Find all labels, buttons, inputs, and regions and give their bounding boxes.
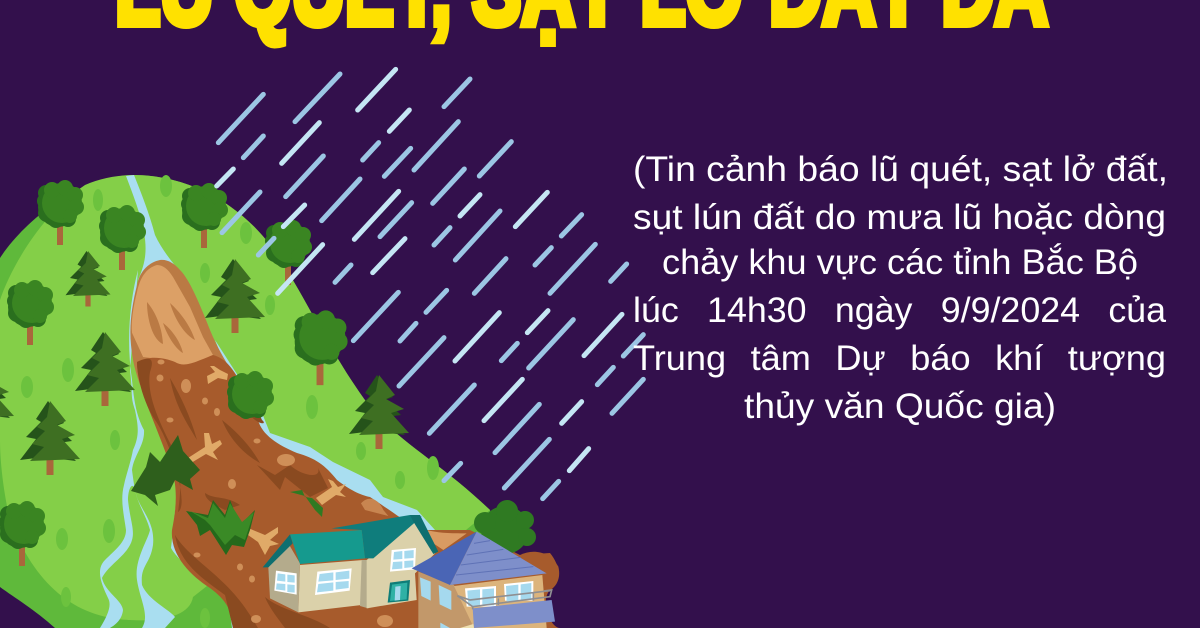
landslide scar [130, 260, 240, 385]
source note text: sụt lún đất do mưa lũ hoặc dòng [633, 198, 1166, 237]
back roof [332, 515, 422, 558]
source note text: thủy văn Quốc gia) [744, 387, 1056, 426]
front roof [290, 530, 365, 564]
debris flow [137, 355, 560, 628]
pines [66, 251, 110, 306]
tree behind house [474, 500, 536, 554]
houses [263, 499, 559, 628]
grass tufts [21, 175, 439, 628]
rain streaks [217, 69, 643, 499]
blue house [418, 572, 475, 628]
fallen logs [188, 366, 346, 555]
rocks [156, 360, 393, 627]
hill base [0, 175, 520, 628]
green house walls [268, 543, 300, 612]
river left branches [100, 270, 175, 628]
source note text: chảy khu vực các tỉnh Bắc Bộ [662, 243, 1138, 282]
source note text: (Tin cảnh báo lũ quét, sạt lở đất, [633, 150, 1168, 189]
door [388, 580, 410, 603]
source note text [633, 150, 1168, 426]
mound [517, 552, 559, 593]
fallen pines [131, 435, 323, 555]
round trees [37, 180, 84, 245]
river along flow [171, 340, 435, 628]
windows [274, 548, 416, 595]
flow shading [137, 359, 330, 628]
illustration: hillside with landslide [0, 175, 560, 628]
bush on flow [227, 371, 274, 419]
source note text: lúc 14h30 ngày 9/9/2024 của [633, 291, 1167, 330]
river upper [126, 175, 200, 310]
hill light surface [0, 175, 490, 620]
source note text: Trung tâm Dự báo khí tượng [633, 339, 1166, 378]
